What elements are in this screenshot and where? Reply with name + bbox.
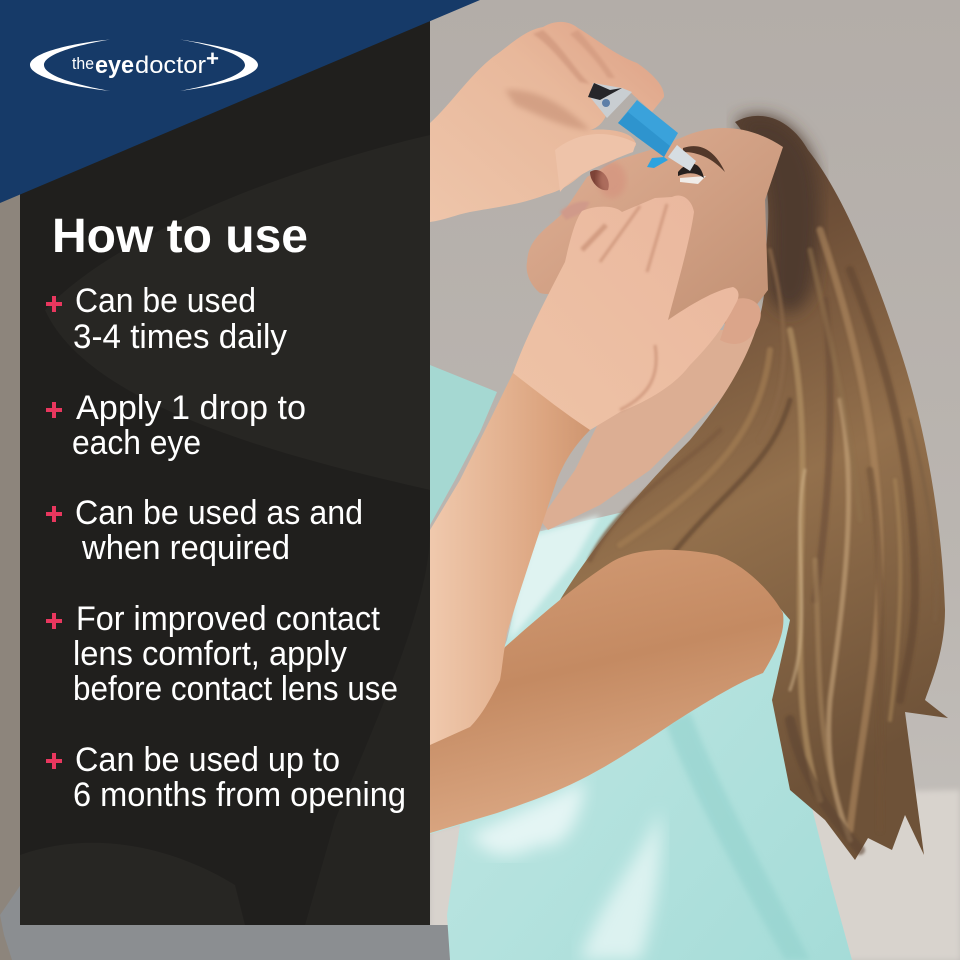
item: dose: Apply 1 drop to: [76, 389, 306, 427]
item: frequency: 3-4 times daily: [73, 318, 287, 356]
neck: [540, 330, 770, 530]
item: frequency: [46, 282, 287, 356]
logo: left swoosh: [30, 40, 110, 91]
eye: [678, 164, 706, 184]
forearm: [430, 373, 620, 745]
nose shadow: [598, 162, 626, 198]
nostril: [590, 170, 609, 190]
logo: wordmark: doctor: [135, 52, 206, 79]
item: dose: each eye: [72, 424, 201, 462]
shirt: far sleeve: [430, 365, 497, 525]
item: as required: when required: [81, 529, 290, 567]
eyebrow: [683, 146, 725, 172]
item: contact lenses: For improved contact: [76, 600, 381, 638]
ear: [720, 298, 761, 344]
logo: right swoosh: [180, 40, 258, 91]
item: shelf life: Can be used up to: [75, 741, 340, 779]
jeans: [0, 880, 462, 960]
heading: How to use: [52, 210, 308, 263]
upper hand: [430, 22, 664, 222]
item: shelf life: 6 months from opening: [73, 776, 406, 814]
lower hand: [513, 195, 739, 430]
item: contact lenses: before contact lens use: [73, 670, 398, 708]
logo: wordmark: +: [206, 46, 219, 71]
logo: wordmark: eye: [95, 52, 134, 79]
logo: wordmark: the: [72, 54, 94, 73]
item: dose: [46, 389, 306, 462]
bottle tab: [647, 157, 668, 168]
hair: main mass: [560, 116, 948, 860]
bed: [430, 790, 960, 960]
bottle nozzle: [668, 145, 696, 171]
item: frequency: Can be used: [75, 282, 256, 320]
item: shelf life: [46, 741, 406, 814]
bottle cap label: [590, 83, 632, 118]
left background strip: [0, 190, 24, 960]
bottle blue body: [618, 100, 678, 157]
item: as required: Can be used as and: [75, 494, 363, 532]
lips: [560, 201, 590, 220]
shirt: torso: [430, 455, 852, 960]
face: [527, 128, 783, 344]
item: contact lenses: [46, 600, 398, 708]
item: contact lenses: lens comfort, apply: [73, 635, 347, 673]
eye drop bottle: [588, 83, 696, 171]
item: as required: [46, 494, 363, 567]
upper arm: [430, 550, 783, 833]
logo: [30, 40, 258, 91]
